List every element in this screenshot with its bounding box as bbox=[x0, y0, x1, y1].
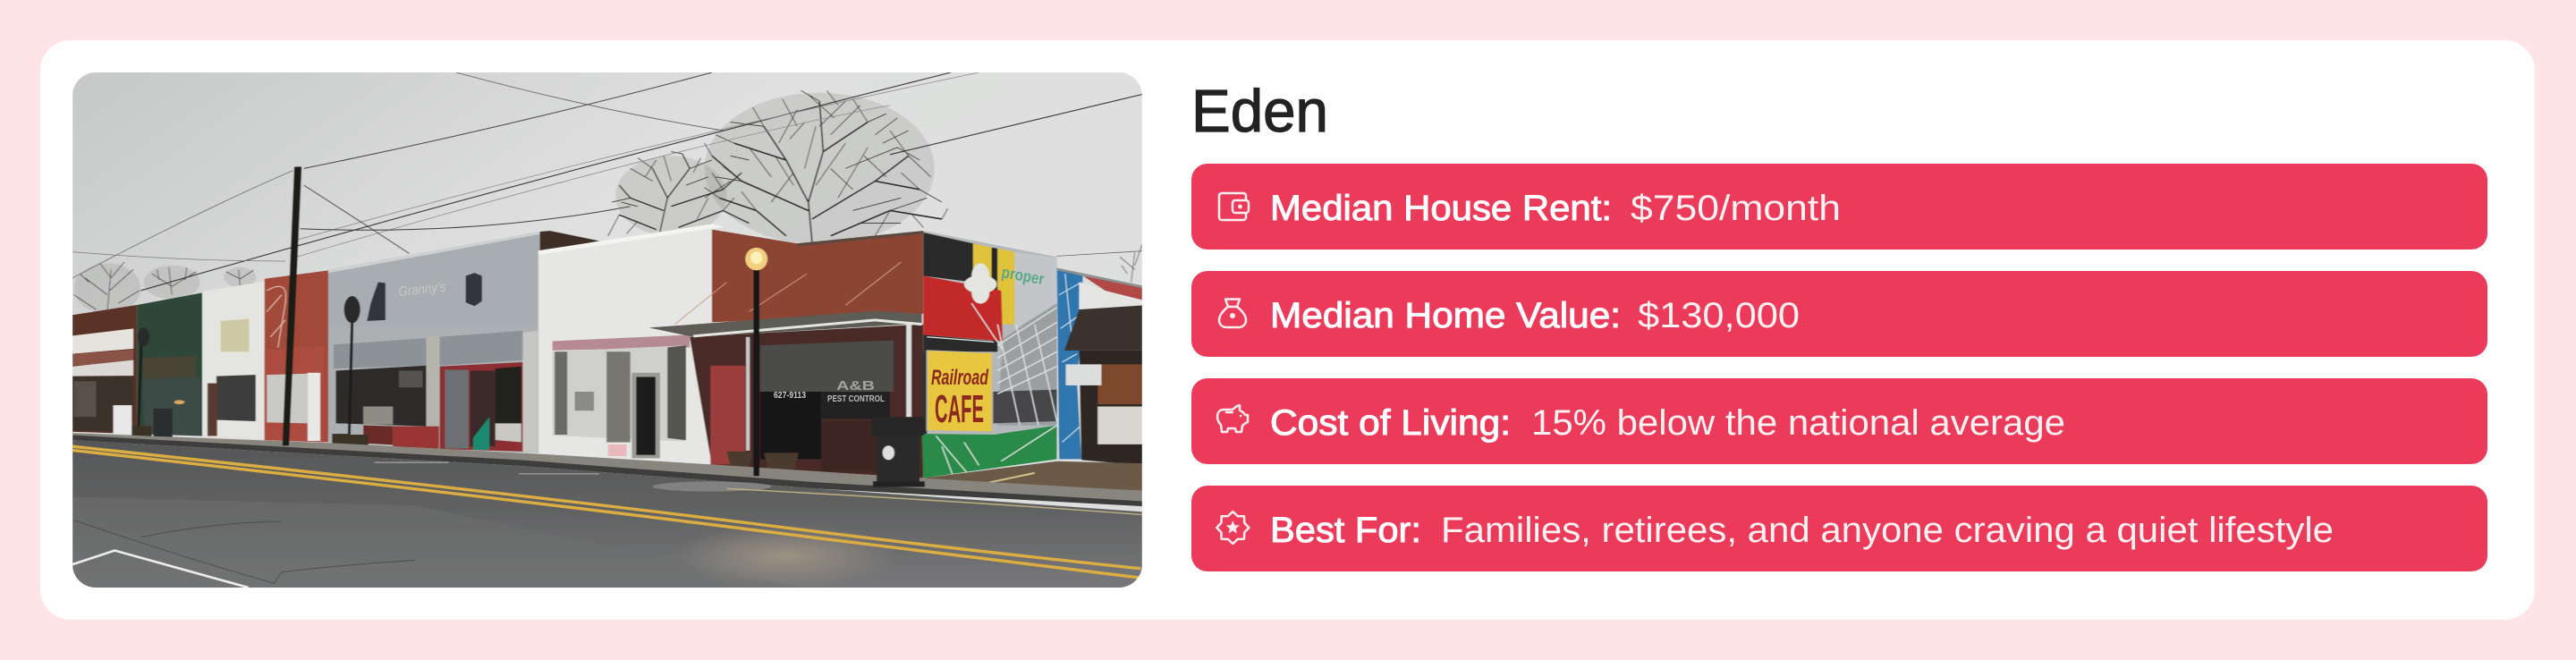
white shop with posters bbox=[538, 224, 723, 464]
row: best for: Best For: bbox=[1270, 511, 1421, 550]
row: median home value: Median Home Value: bbox=[1270, 296, 1621, 335]
photo sign text bbox=[398, 263, 1046, 431]
photo sign text: CAFE bbox=[935, 387, 984, 431]
photo sign text: proper bbox=[1000, 263, 1046, 288]
ground bbox=[923, 461, 1142, 491]
street pole bbox=[283, 166, 301, 445]
icon: piggy bank bbox=[1217, 405, 1248, 432]
photo sign text: 627-9113 bbox=[774, 391, 806, 401]
row: cost of living bbox=[1191, 378, 2487, 464]
photo sign text: Railroad bbox=[931, 366, 989, 390]
photo sign text: Granny's bbox=[398, 279, 447, 300]
row: cost of living: Cost of Living: bbox=[1270, 403, 1511, 443]
row: best for bbox=[1191, 486, 2487, 571]
row: median home value bbox=[1191, 271, 2487, 357]
icon: star badge bbox=[1216, 512, 1249, 544]
trash can bbox=[871, 417, 925, 436]
far trees bbox=[74, 263, 140, 314]
white shop bbox=[202, 282, 265, 439]
double yellow line bbox=[72, 446, 1140, 569]
photo sign text: PEST CONTROL bbox=[827, 394, 885, 404]
yellow cafe sign bbox=[927, 351, 992, 432]
brick building bbox=[712, 230, 923, 322]
road cracks bbox=[74, 520, 415, 583]
grey shops bbox=[328, 231, 599, 453]
row: best for: Families, retirees, and anyone craving a quiet lifestyle bbox=[1441, 511, 2334, 550]
photo sign text: A&B bbox=[836, 378, 875, 393]
far-left shop bbox=[72, 305, 137, 434]
large tree crowns bbox=[705, 93, 935, 244]
icon: money bag bbox=[1219, 299, 1246, 327]
green shop bbox=[137, 292, 202, 436]
power lines bbox=[304, 72, 712, 168]
row: median home value: $130,000 bbox=[1638, 296, 1800, 335]
right building bbox=[1079, 283, 1084, 309]
row: median house rent bbox=[1191, 164, 2487, 250]
mural wall bbox=[923, 231, 1057, 478]
red shop bbox=[265, 270, 328, 443]
photo: Eden main street bbox=[72, 72, 1142, 588]
blue wall bbox=[1057, 269, 1083, 459]
parking line bbox=[72, 551, 249, 588]
street lamp bbox=[753, 269, 759, 476]
title: Eden bbox=[1191, 78, 1328, 145]
row: median house rent: Median House Rent: bbox=[1270, 189, 1612, 228]
row: median house rent: $750/month bbox=[1631, 189, 1841, 228]
row: cost of living: 15% below the national average bbox=[1531, 403, 2065, 443]
icon: wallet bbox=[1219, 193, 1249, 220]
